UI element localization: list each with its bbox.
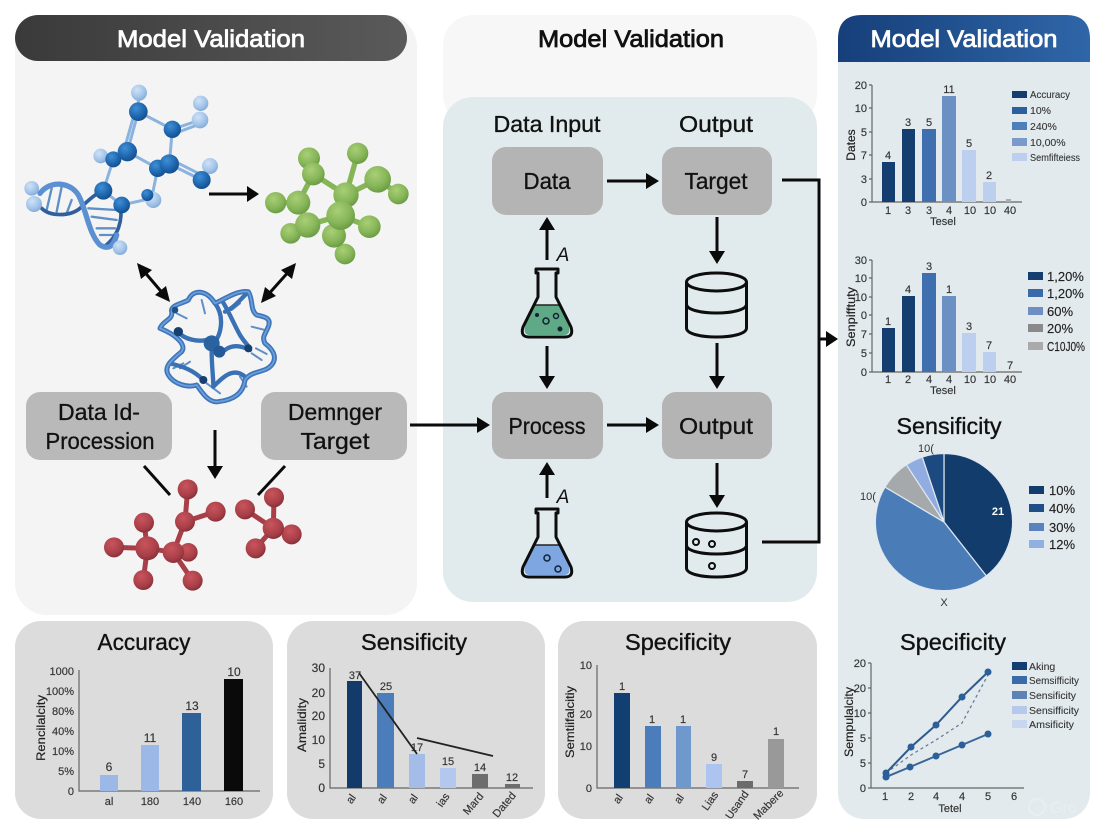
box: data id procession: Data Id- [58,399,140,425]
box: target [662,147,772,215]
panel: molecules [15,15,417,615]
chart: line: 4 [933,791,939,803]
chart: bars sensitivity: 1 [946,284,952,296]
panel: accuracy chart: 40% [52,726,74,738]
panel: sensificity chart: ias [435,791,453,809]
chart: bars sensitivity: 10 [855,292,867,304]
heading: specificity: Specificity [625,629,731,655]
panel: specificity chart: Usand [724,789,752,822]
chart: bars dates: 2 [986,170,992,182]
panel: accuracy chart [15,621,273,819]
legend: line chart: Sensifficity [1029,705,1080,717]
box: demnger target: Target [300,428,370,454]
chart: bars sensitivity: Tesel [930,385,956,397]
panel: specificity chart: 7 [742,769,748,781]
legend: percent bars: 20% [1047,321,1073,336]
chart: bars dates: Dates [844,129,858,161]
header: right model validation: Model Validation [870,26,1058,53]
panel: sensificity chart: 30 [312,661,325,675]
molecule: DNA knot [160,291,274,402]
legend: line chart: Aking [1029,661,1055,673]
panel: specificity chart: 9 [711,752,717,764]
arrow: process to output [607,417,659,433]
label: A upper: A [556,245,569,266]
arrow: blue to green [209,186,259,202]
chart: bars dates: 5 [966,138,972,150]
label: output: Output [679,111,754,137]
panel: accuracy chart: 160 [225,796,243,808]
chart: line: 5 [985,791,991,803]
chart: line: 6 [1011,791,1017,803]
arrow: left panel to process [410,417,490,433]
chart: bars dates: 4 [885,150,891,162]
molecule: red large [104,479,226,591]
panel: specificity chart: 1 [773,726,779,738]
chart: bars sensitivity: 10 [964,374,976,386]
chart: bars sensitivity: 1 [885,316,891,328]
panel: accuracy chart: 180 [141,796,159,808]
legend: line chart: Sensificity [1029,690,1077,702]
panel: accuracy chart: 10% [52,746,74,758]
watermark [1029,799,1077,817]
heading: specificity line chart: Specificity [900,629,1006,655]
legend: accuracy bars: Semfifteiess [1030,152,1080,164]
panel: sensificity chart: 20 [312,709,325,723]
panel: specificity chart: al [672,792,687,806]
chart: bars dates: 4 [946,205,952,217]
legend: percent bars: 1,20% [1047,269,1084,284]
chart: pie [860,443,1013,609]
panel: accuracy chart: 100% [46,686,74,698]
panel: sensificity chart: al [344,792,359,806]
chart: line: 1 [882,791,888,803]
panel: specificity chart: 10 [580,741,592,753]
box: output: Output [679,413,754,439]
panel: sensificity chart: Dated [491,790,519,820]
panel: specificity chart: 1 [649,714,655,726]
panel: sensificity chart: 5 [318,757,325,771]
chart: bars dates: 10 [964,205,976,217]
chart: bars sensitivity: 7 [1007,360,1013,372]
chart: line: 2 [908,791,914,803]
legend: pie: 12% [1049,537,1075,552]
chart: pie: 10( [860,491,876,503]
chart: line: 5 [860,758,866,770]
panel: sensificity chart: 17 [411,742,423,754]
chart: bars dates: 7 [861,150,867,162]
connector: workflow to metrics [762,180,838,542]
chart: bars sensitivity: 10 [855,273,867,285]
chart: bars dates: 1 [885,205,891,217]
arrow: flask down to process [539,346,555,389]
chart: pie: X [940,597,948,609]
chart: bars sensitivity: 5 [861,348,867,360]
panel: specificity chart: Mabere [751,787,786,822]
chart: bars dates [844,80,1022,228]
legend: accuracy bars: 10% [1030,105,1051,117]
chart: bars sensitivity: Senpifftuty [844,287,858,347]
panel: sensificity chart: 10 [312,733,325,747]
box: demnger target [261,392,407,460]
chart: bars dates: Tesel [930,216,956,228]
legend: accuracy bars: 10,00% [1030,137,1066,149]
panel: sensificity chart: 15 [442,756,454,768]
arrow: flask up to process [539,462,555,498]
heading: accuracy: Accuracy [98,629,191,655]
panel: accuracy chart: 6 [106,760,113,774]
panel: accuracy chart: 140 [183,796,201,808]
legend: line chart: Semsifficity [1029,675,1080,687]
chart: line: Tetel [938,803,962,815]
chart: line: 10 [854,708,866,720]
panel: sensificity chart: 12 [506,772,518,784]
chart: bars sensitivity: 4 [946,374,952,386]
chart: bars dates: 11 [943,84,955,96]
panel: sensificity chart [287,621,545,820]
chart: bars sensitivity: 0 [861,310,867,322]
panel: specificity chart: al [611,792,626,806]
icon: database plain [686,273,746,337]
panel: specificity chart: 10 [580,660,592,672]
chart: pie: 10( [918,443,934,455]
legend: pie [1029,483,1075,552]
panel: metrics [838,15,1090,819]
chart: bars dates: 10 [855,103,867,115]
chart: bars sensitivity: 10 [984,374,996,386]
chart: bars sensitivity: 7 [861,329,867,341]
molecule: red small [235,487,302,558]
legend: pie: 10% [1049,483,1075,498]
panel: accuracy chart: 80% [52,706,74,718]
arrow: database to output [709,343,725,389]
connector: right box to red molecule [258,466,285,495]
panel: sensificity chart: al [406,792,421,806]
chart: bars dates: 5 [926,117,932,129]
chart: bars sensitivity: 4 [905,284,911,296]
box: target: Target [684,168,748,194]
chart: line: Sempulalcity [842,687,856,757]
panel: sensificity chart: al [375,792,390,806]
icon: green flask [522,269,572,337]
legend: pie: 30% [1049,520,1075,535]
box: demnger target: Demnger [288,399,382,425]
header: left model validation [15,15,407,61]
chart: bars dates: 40 [1004,205,1016,217]
chart: bars dates: 5 [861,127,867,139]
chart: bars dates: 3 [905,205,911,217]
box: data id procession: Procession [46,428,154,454]
chart: bars dates: 3 [905,117,911,129]
box: output [662,392,772,459]
chart: bars dates: 3 [926,205,932,217]
box: data: Data [524,168,571,194]
chart: line: 4 [959,791,965,803]
chart: line [842,658,1024,815]
panel: accuracy chart: 1000 [50,666,74,678]
panel: accuracy chart: al [105,796,113,808]
panel: sensificity chart: Amalidity [295,698,309,752]
legend: accuracy bars: Accuracy [1030,89,1071,101]
panel: accuracy chart: Rencilalcity [34,695,48,761]
panel: accuracy chart: 10 [227,665,241,679]
panel: sensificity chart: 25 [380,681,392,693]
arrow: flask up to data [539,217,555,260]
icon: database with dots [686,513,746,577]
panel: specificity chart: 1 [619,681,625,693]
heading: sensificity: Sensificity [361,629,467,655]
box: data id procession [26,392,172,460]
chart: bars sensitivity: 3 [926,261,932,273]
header: left model validation: Model Validation [117,26,305,53]
label: A lower: A [556,487,569,508]
legend: line chart [1012,661,1080,731]
box: data [492,147,603,215]
panel: middle header area [443,15,817,125]
arrow: target to database [709,217,725,264]
chart: bars sensitivity: 3 [966,321,972,333]
box: process: Process [508,413,586,439]
panel: sensificity chart: 14 [474,762,486,774]
chart: bars sensitivity: 40 [1004,374,1016,386]
chart: line: 20 [854,658,866,670]
molecule: green [265,143,409,264]
icon: blue flask [522,509,572,577]
panel: sensificity chart: 0 [318,781,325,795]
chart: bars dates: 20 [855,80,867,92]
chart: bars sensitivity: 4 [926,374,932,386]
legend: percent bars: C10J0% [1047,339,1085,354]
chart: bars sensitivity: 7 [986,340,992,352]
heading: middle model validation: Model Validation [538,26,724,53]
panel: sensificity chart: Mard [461,791,486,818]
panel: specificity chart: Semtiifalcitiy [563,686,577,758]
chart: bars sensitivity: 30 [855,255,867,267]
panel: specificity chart: 20 [580,709,592,721]
arrow: data to target [607,173,659,189]
legend: accuracy bars [1012,89,1080,164]
arrow: double blue to knot [137,263,170,302]
molecule: blue with DNA helix [24,85,218,255]
watermark: Gro [1050,800,1077,817]
chart: bars dates: 10 [984,205,996,217]
panel: accuracy chart: 11 [144,731,157,745]
panel: sensificity chart: 37 [349,670,361,682]
label: data input: Data Input [494,111,601,137]
arrow: output to database [709,463,725,508]
chart: bars dates: 0 [861,197,867,209]
chart: line: 5 [860,733,866,745]
legend: pie: 40% [1049,501,1075,516]
heading: sensificity pie: Sensificity [896,413,1002,439]
panel: specificity chart: Lias [700,789,722,813]
panel: accuracy chart: 0 [68,786,74,798]
chart: bars sensitivity: 1 [885,374,891,386]
panel: specificity chart: 1 [680,714,686,726]
chart: line: 0 [860,783,866,795]
chart: bars sensitivity [844,255,1022,397]
connector: left box to red molecule [144,466,170,495]
panel: sensificity chart: 20 [312,686,325,700]
chart: bars dates: 3 [861,174,867,186]
chart: pie: 21 [992,506,1004,518]
legend: percent bars: 60% [1047,304,1073,319]
chart: bars sensitivity: 2 [905,374,911,386]
legend: percent bars: 1,20% [1047,286,1084,301]
legend: line chart: Amsificity [1029,719,1075,731]
legend: accuracy bars: 240% [1030,121,1057,133]
panel: specificity chart [558,621,817,822]
arrow: double green to knot [261,263,296,303]
arrow: knot down to red molecule [207,430,223,479]
panel: specificity chart: 0 [586,783,592,795]
box: process [492,392,603,459]
chart: bars sensitivity: 0 [861,367,867,379]
legend: percent bars [1028,269,1085,354]
panel: accuracy chart: 5% [58,766,74,778]
chart: line: 20 [854,683,866,695]
panel: workflow [443,97,817,602]
panel: specificity chart: al [642,792,657,806]
header: right model validation [838,15,1090,62]
panel: accuracy chart: 13 [185,699,199,713]
